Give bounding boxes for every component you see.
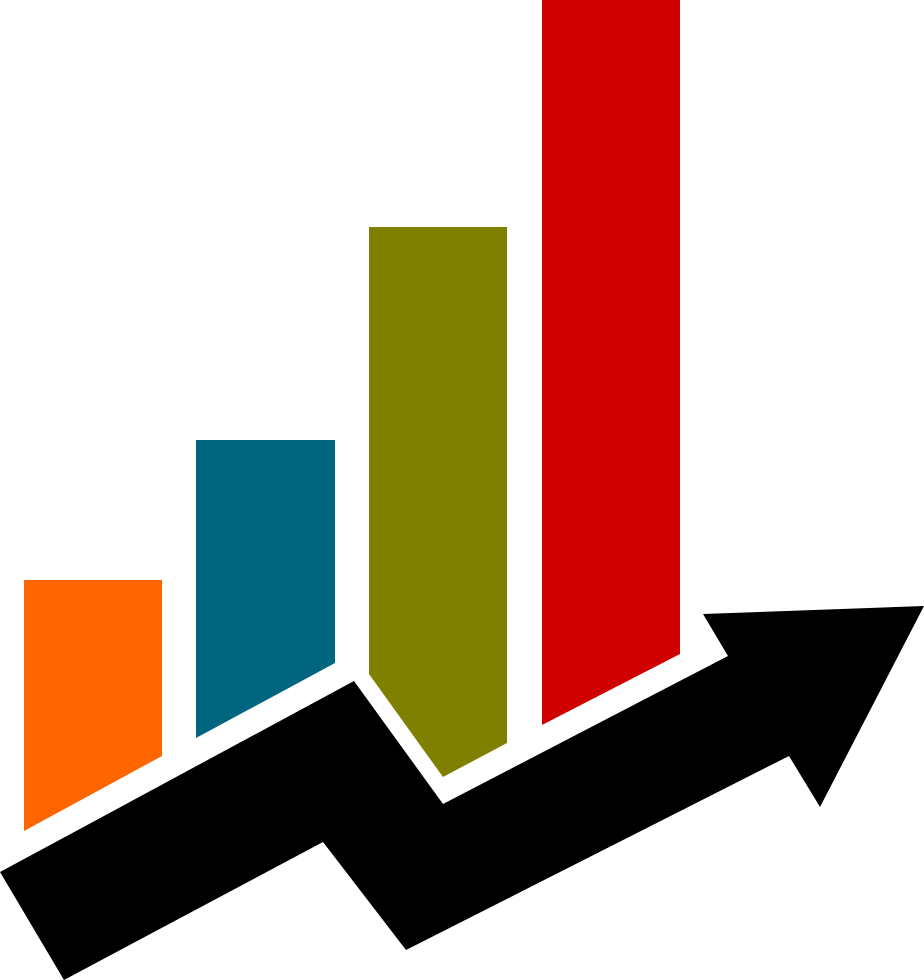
arrow: black zigzag trending up <box>0 606 924 980</box>
bar: teal <box>196 440 335 738</box>
bar: olive <box>369 227 507 777</box>
bar: orange <box>24 580 162 831</box>
bar: red <box>542 0 680 725</box>
